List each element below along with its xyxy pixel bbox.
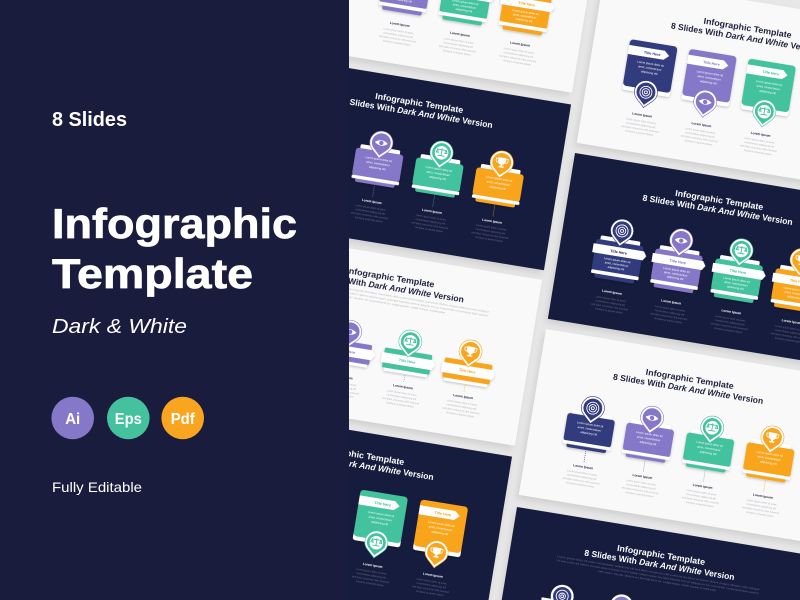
column 4 orange: Lorem ipsum dolor sit amet,: [746, 499, 778, 507]
column 3 green: sed diam nonummy nibh euismod: [710, 322, 748, 331]
column 1 navy: consectetuer adipiscing elit: [595, 299, 626, 307]
column 4 orange: Lorem ipsum dolor sit amet,: [503, 47, 535, 55]
column 3 green: [676, 412, 738, 510]
column 1 navy: Lorem ipsum dolor sit: [637, 60, 664, 68]
slide: white third-left: [219, 231, 542, 446]
column 4 orange: Title Here: [518, 1, 535, 8]
column 2 purple: consectetuer adipiscing elit: [355, 208, 385, 216]
slide title: Infographic Template: [375, 91, 464, 115]
column 1 navy: tincidunt ut laoreet dolore: [625, 129, 654, 137]
column 4 orange: consectetuer adipiscing elit: [746, 503, 776, 511]
column 1 navy: amet, consectetuer: [638, 64, 662, 72]
column 2 purple: sed diam nonummy nibh euismod: [680, 134, 718, 144]
slide description: vel eum iriure dolor in hendrerit in vulputate velit esse molestie: [327, 292, 447, 315]
column 2 purple: Lorem ipsum dolor sit amet,: [383, 27, 414, 35]
slide description: Lorem ipsum dolor sit amet consectetuer adipiscing elit sed diam nonummy nibh euismod tincidunt ut laoreet dolore magna aliquam erat volutpat: [286, 278, 489, 314]
column 2 purple: [616, 402, 678, 500]
column 1 navy: [615, 39, 678, 139]
column 3 green: Lorem Ipsum: [721, 308, 742, 315]
column 3 green: [405, 137, 467, 235]
column 3 green: Lorem ipsum dolor sit: [425, 165, 453, 173]
column 4 orange: [736, 422, 798, 520]
column 4 orange: sed diam nonummy nibh euismod: [471, 231, 509, 240]
column 3 green: sed diam nonummy nibh euismod: [740, 144, 778, 153]
column 1 navy: Title Here: [644, 50, 661, 57]
slide: dark second-left: [248, 56, 571, 270]
column 2 purple: Lorem ipsum dolor sit: [696, 69, 724, 78]
column 3 green: adipiscing elit: [759, 89, 776, 95]
column 2 purple: tincidunt ut laoreet dolore: [355, 216, 383, 224]
column 3 green: Lorem ipsum dolor sit: [368, 510, 395, 518]
column 4 orange: sed diam nonummy nibh euismod: [412, 585, 450, 594]
subtitle: Dark & White: [52, 316, 187, 338]
editable note: Fully Editable: [52, 479, 142, 495]
column 2 purple: Lorem Ipsum: [632, 473, 653, 480]
column 2 purple: [345, 127, 407, 225]
column 2 purple: Lorem ipsum dolor sit amet,: [655, 305, 686, 313]
format badge: Eps: [107, 397, 150, 439]
column 1 navy pin: [541, 585, 574, 600]
column 3 green: Lorem ipsum dolor sit amet,: [386, 389, 418, 397]
column 4 orange: Lorem ipsum dolor sit amet,: [447, 399, 478, 407]
column 1 navy: Lorem ipsum dolor sit: [604, 256, 631, 264]
column 3 green: sed diam nonummy nibh euismod: [352, 575, 390, 584]
column 2 purple: Lorem ipsum dolor sit amet,: [626, 479, 657, 487]
column 2 purple: adipiscing elit: [700, 79, 717, 86]
column 3 green: amet, consectetuer: [426, 170, 450, 177]
column 1 navy: [556, 393, 618, 490]
column 3 green: tincidunt ut laoreet dolore: [744, 149, 772, 156]
column 2 purple: tincidunt ut laoreet dolore: [684, 139, 713, 147]
column 3 green: tincidunt ut laoreet dolore: [356, 580, 384, 587]
column 3 green: consectetuer adipiscing elit: [386, 393, 417, 401]
format badge: Ai: Ai: [65, 411, 80, 428]
column 3 green: Title Here: [729, 269, 747, 275]
column 3 green: adipiscing elit: [371, 520, 388, 526]
column 3 green: tincidunt ut laoreet dolore: [443, 49, 471, 57]
column 4 orange: Lorem ipsum dolor sit amet,: [416, 578, 448, 586]
column 3 green: amet, consectetuer: [756, 84, 780, 91]
column 3 green: consectetuer adipiscing elit: [415, 218, 446, 226]
slide: dark middle-right: [548, 153, 800, 367]
column 4 orange: tincidunt ut laoreet dolore: [503, 59, 532, 67]
column 4 orange: consectetuer adipiscing elit: [475, 228, 506, 236]
column 1 navy: adipiscing elit: [580, 430, 598, 437]
column 4 orange: consectetuer adipiscing elit: [416, 582, 446, 590]
column 3 green: [431, 0, 496, 59]
column 4 orange: consectetuer adipiscing elit: [503, 51, 534, 59]
column 2 purple: adipiscing elit: [639, 440, 657, 446]
column 4 orange: amet, consectetuer: [513, 12, 537, 20]
column 2 purple: Title Here: [669, 259, 686, 265]
format badge: Pdf: [161, 397, 204, 439]
column 4 orange: sed diam nonummy nibh euismod: [442, 406, 480, 416]
main title: Template: [52, 250, 253, 297]
column 3 green: Lorem ipsum dolor sit amet,: [415, 214, 447, 222]
column 3 green: adipiscing elit: [700, 449, 717, 456]
column 3 green: Lorem ipsum dolor sit: [696, 440, 723, 448]
column 2 purple: tincidunt ut laoreet dolore: [383, 39, 411, 47]
column 4 orange: Lorem ipsum dolor sit: [428, 520, 455, 528]
column 3 green: [702, 235, 771, 337]
column 2 purple: Lorem Ipsum: [389, 21, 410, 28]
slide description: vel eum iriure dolor in hendrerit in vulputate velit esse molestie: [597, 570, 717, 592]
column 4 orange: Lorem Ipsum: [510, 41, 530, 48]
format badge: Eps: Eps: [115, 411, 142, 428]
column 3 green: tincidunt ut laoreet dolore: [415, 226, 444, 234]
column 4 orange: amet, consectetuer: [486, 179, 510, 187]
column 1 navy: amet, consectetuer: [577, 425, 602, 433]
slide description: Ut wisi enim ad minim veniam quis nostrud exerci tation ullamcorper suscipit lobortis nisl ut aliquip ex ea commodo consequat duis autem: [556, 559, 759, 595]
column 3 green: sed diam nonummy nibh euismod: [682, 496, 720, 505]
column 2 purple: amet, consectetuer: [366, 160, 390, 167]
column 4 orange: consectetuer adipiscing elit: [446, 403, 477, 411]
column 2 purple: amet, consectetuer: [637, 435, 661, 442]
column 1 navy: Lorem Ipsum: [602, 289, 622, 296]
column 3 green: tincidunt ut laoreet dolore: [714, 327, 743, 334]
column 3 green: [346, 489, 408, 589]
column 4 orange: tincidunt ut laoreet dolore: [746, 511, 775, 518]
column 3 green: adipiscing elit: [727, 284, 744, 291]
column 1 navy: tincidunt ut laoreet dolore: [566, 481, 595, 489]
column 2 purple: tincidunt ut laoreet dolore: [326, 391, 354, 399]
slide title: 8 Slides With Dark And White Version: [642, 193, 794, 227]
slide description: Lorem ipsum dolor sit amet consectetuer adipiscing elit sed diam nonummy nibh euismod tincidunt ut laoreet dolore magna aliquam erat volutpat: [557, 555, 760, 591]
column 2 purple: Title Here: [703, 60, 720, 67]
column 2 purple: sed diam nonummy nibh euismod: [322, 387, 360, 396]
slide: dark bottom-right: [502, 507, 800, 600]
column 3 green: Lorem ipsum dolor sit: [756, 79, 783, 87]
column 2 purple: Lorem Ipsum: [333, 373, 353, 381]
column 1 navy: adipiscing elit: [641, 69, 658, 76]
column 3 green: Lorem ipsum dolor sit amet,: [686, 489, 717, 497]
slide: dark bottom-left: [189, 408, 512, 600]
column 4 orange: amet, consectetuer: [757, 454, 781, 462]
column 1 navy: Lorem Ipsum: [573, 463, 594, 470]
column 3 green: consectetuer adipiscing elit: [744, 141, 774, 149]
column 4 orange: sed diam nonummy nibh euismod: [742, 506, 780, 515]
column 3 green: adipiscing elit: [455, 7, 473, 13]
column 3 green: Lorem ipsum dolor sit amet,: [744, 137, 775, 145]
column 2 purple: Lorem Ipsum: [362, 198, 382, 205]
column 1 navy: Lorem ipsum dolor sit amet,: [595, 295, 627, 303]
column 2 purple: amet, consectetuer: [697, 74, 721, 82]
slide title: 8 Slides With Dark And White Version: [584, 548, 735, 582]
column 4 orange: adipiscing elit: [431, 529, 449, 536]
column 4 orange: Lorem Ipsum: [482, 218, 503, 225]
column 4 orange: Lorem Ipsum: [753, 493, 773, 500]
column 4 orange: amet, consectetuer: [428, 524, 453, 532]
column 3 green: adipiscing elit: [429, 175, 446, 181]
column 2 purple: [642, 225, 711, 327]
column 2 purple: Lorem ipsum dolor sit: [636, 430, 663, 438]
slide title: Infographic Template: [703, 16, 793, 40]
column 2 purple: [674, 49, 737, 148]
column 2 purple: consectetuer adipiscing elit: [685, 131, 715, 139]
column 2 purple: Lorem Ipsum: [691, 121, 712, 128]
column 2 purple: Lorem Ipsum: [661, 298, 682, 306]
column 4 orange: Title Here: [459, 368, 476, 375]
column 2 purple: adipiscing elit: [369, 165, 386, 171]
slide title: Infographic Template: [645, 367, 735, 391]
column 3 green: consectetuer adipiscing elit: [686, 493, 716, 501]
column 1 navy: [583, 215, 652, 317]
column 3 green: Lorem Ipsum: [393, 383, 413, 390]
column 3 green: consectetuer adipiscing elit: [356, 572, 386, 580]
column 1 navy: sed diam nonummy nibh euismod: [591, 303, 629, 312]
column 3 green: amet, consectetuer: [724, 280, 748, 288]
column 3 green: [374, 326, 440, 411]
column 4 orange: [434, 336, 500, 421]
column 4 orange: [406, 499, 468, 599]
column 1 navy: Lorem ipsum dolor sit amet,: [626, 117, 657, 125]
column 2 purple: sed diam nonummy nibh euismod: [621, 486, 659, 495]
column 2 purple: Lorem ipsum dolor sit amet,: [685, 127, 716, 135]
column 1 navy: adipiscing elit: [607, 265, 625, 271]
column 2 purple: Title Here: [338, 348, 355, 355]
column 2 purple: sed diam nonummy nibh euismod: [351, 211, 389, 220]
column 3 green: sed diam nonummy nibh euismod: [411, 221, 449, 230]
column 3 green: Title Here: [762, 70, 779, 77]
column 3 green: consectetuer adipiscing elit: [443, 41, 473, 49]
column 3 green: tincidunt ut laoreet dolore: [386, 401, 415, 409]
column 4 orange: Lorem ipsum dolor sit: [756, 450, 784, 458]
slide title: Infographic Template: [616, 543, 706, 567]
column 4 orange: Lorem ipsum dolor sit: [486, 175, 513, 183]
slide title: Infographic Template: [316, 443, 405, 467]
slide description: [555, 555, 760, 599]
column 3 green: Lorem ipsum dolor sit amet,: [715, 315, 746, 323]
column 3 green: Title Here: [399, 358, 416, 365]
slide: white lower-right: [519, 329, 800, 543]
column 4 orange: [491, 0, 557, 69]
column 4 orange: adipiscing elit: [489, 184, 506, 191]
slide title: 8 Slides With Dark And White Version: [283, 448, 435, 482]
column 1 navy: sed diam nonummy nibh euismod: [562, 477, 600, 486]
column 3 green: sed diam nonummy nibh euismod: [382, 397, 420, 406]
column 3 green: Title Here: [374, 501, 391, 508]
column 3 green: amet, consectetuer: [368, 515, 392, 522]
slide count: 8 Slides: [52, 109, 127, 131]
slide title: 8 Slides With Dark And White Version: [313, 270, 465, 304]
column 2 purple: tincidunt ut laoreet dolore: [654, 317, 683, 325]
column 3 green: Lorem Ipsum: [362, 562, 383, 569]
column 2 purple: adipiscing elit: [667, 274, 684, 281]
column 2 purple: tincidunt ut laoreet dolore: [625, 491, 654, 499]
column 3 green: [734, 58, 796, 158]
slide title: 8 Slides With Dark And White Version: [342, 96, 494, 130]
main title: [52, 200, 297, 297]
column 4 orange: sed diam nonummy nibh euismod: [499, 54, 537, 64]
column 1 navy: Lorem Ipsum: [632, 111, 653, 119]
column 2 purple: Lorem ipsum dolor sit: [365, 155, 392, 163]
slide title: Infographic Template: [675, 188, 764, 212]
column 2 purple: consectetuer adipiscing elit: [626, 483, 656, 491]
column 3 green: Lorem ipsum dolor sit amet,: [443, 37, 474, 45]
column 4 orange: Lorem Ipsum: [423, 572, 443, 579]
column 1 navy: Title Here: [610, 249, 627, 256]
column 1 navy: Lorem ipsum dolor sit amet,: [567, 469, 598, 477]
column 3 green: Lorem ipsum dolor sit amet,: [356, 568, 387, 576]
column 2 purple: sed diam nonummy nibh euismod: [650, 312, 688, 321]
column 2 purple: consectetuer adipiscing elit: [654, 309, 685, 317]
column 4 orange: tincidunt ut laoreet dolore: [416, 590, 445, 597]
column 4 orange: Lorem ipsum dolor sit: [512, 8, 539, 16]
slide title: 8 Slides With Dark And White Version: [612, 372, 764, 406]
slide title: Infographic Template: [346, 265, 435, 290]
main title: Infographic: [52, 200, 297, 247]
column 2 purple: sed diam nonummy nibh euismod: [379, 35, 417, 44]
column 2 purple: Lorem ipsum dolor sit amet,: [355, 204, 386, 212]
column 3 green: amet, consectetuer: [452, 2, 477, 10]
column 3 green: consectetuer adipiscing elit: [715, 319, 745, 327]
column 2 purple: [314, 316, 380, 401]
slide description: [285, 278, 489, 322]
column 4 orange: tincidunt ut laoreet dolore: [475, 236, 504, 243]
column 3 green: tincidunt ut laoreet dolore: [686, 501, 714, 508]
column 1 navy: consectetuer adipiscing elit: [625, 121, 656, 129]
column 2 purple pin: [612, 594, 631, 600]
column 1 navy: amet, consectetuer: [605, 260, 629, 268]
column 2 purple: consectetuer adipiscing elit: [383, 31, 413, 39]
column 1 navy: sed diam nonummy nibh euismod: [621, 125, 659, 134]
column 3 green: Lorem Ipsum: [750, 131, 771, 138]
column 4 orange: adipiscing elit: [515, 17, 533, 23]
column 2 purple: Lorem ipsum dolor sit amet,: [326, 379, 357, 387]
column 1 navy: consectetuer adipiscing elit: [566, 473, 597, 481]
column 2 purple: [371, 0, 436, 49]
left panel: [0, 0, 349, 600]
column 2 purple: consectetuer adipiscing elit: [326, 383, 356, 391]
column 3 green: Lorem Ipsum: [692, 483, 713, 490]
column 2 purple: amet, consectetuer: [664, 270, 688, 278]
column 4 orange: adipiscing elit: [760, 459, 777, 466]
column 3 green: Lorem Ipsum: [422, 208, 442, 215]
column 4 orange: [465, 147, 527, 245]
column 4 orange: Title Here: [434, 511, 451, 517]
column 4 orange: tincidunt ut laoreet dolore: [446, 411, 475, 419]
column 1 navy: Lorem ipsum dolor sit: [577, 420, 604, 429]
slide: white top-right: [577, 0, 800, 191]
column 3 green: Lorem ipsum dolor sit: [723, 276, 750, 284]
slide: white top-left: [276, 0, 599, 93]
column 3 green: sed diam nonummy nibh euismod: [439, 45, 477, 54]
column 2 purple: Lorem ipsum dolor sit: [663, 266, 690, 274]
format badge: Pdf: Pdf: [171, 411, 195, 428]
column 1 navy: tincidunt ut laoreet dolore: [595, 307, 624, 315]
column 4 orange: [763, 245, 800, 346]
column 4 orange: Lorem ipsum dolor sit amet,: [476, 224, 507, 232]
slide description: Ut wisi enim ad minim veniam quis nostrud exerci tation ullamcorper suscipit lobortis nisl ut aliquip ex ea commodo consequat duis autem: [285, 282, 488, 318]
column 3 green: Lorem Ipsum: [450, 31, 470, 38]
column 3 green: amet, consectetuer: [697, 444, 721, 452]
format badge: Ai: [51, 397, 94, 439]
column 4 orange: Lorem Ipsum: [453, 393, 474, 400]
